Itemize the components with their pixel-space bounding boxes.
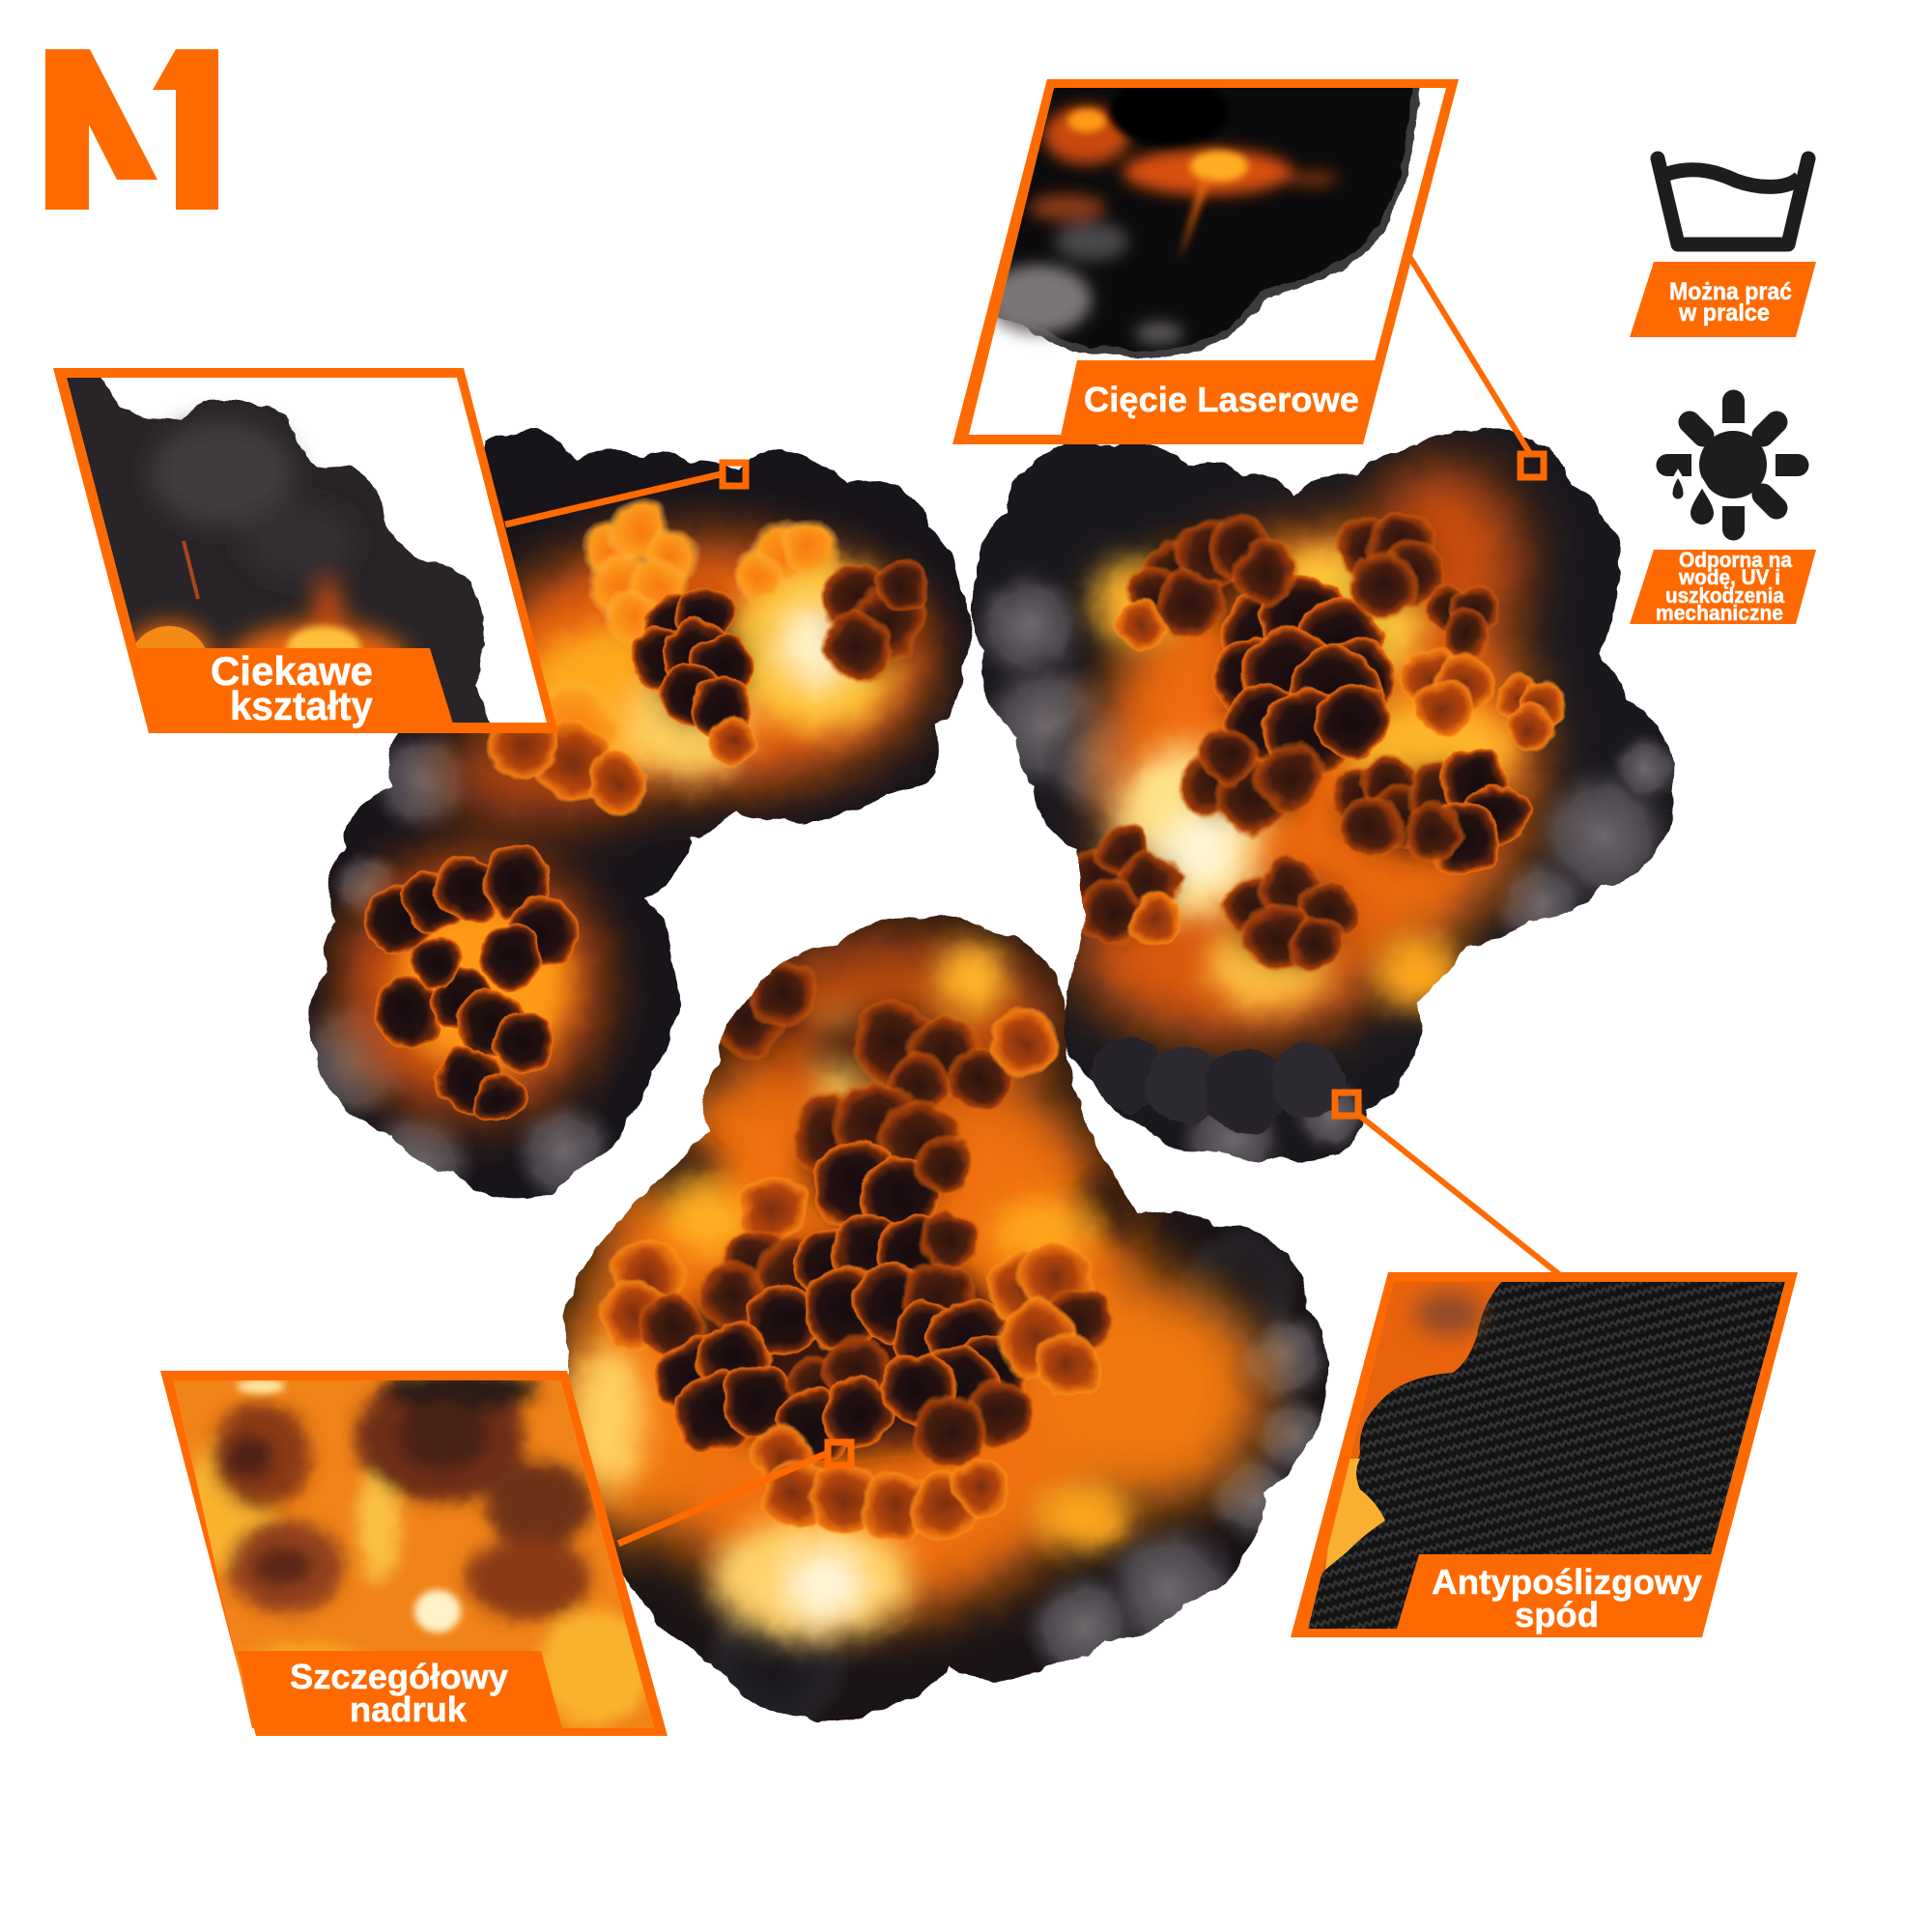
frame — [952, 79, 1459, 444]
caption: Szczegółowy — [290, 1657, 508, 1696]
label: resistance: wodę, UV i — [1678, 565, 1780, 589]
connector: shapes — [505, 463, 746, 525]
panel: Ciecie Laserowe — [952, 76, 1459, 444]
logo: M1 — [45, 49, 218, 210]
connector: anti-slip — [1335, 1093, 1560, 1275]
connector: print — [618, 1442, 851, 1544]
icon: washing basin — [1658, 158, 1808, 244]
label: resistance: uszkodzenia — [1665, 583, 1785, 608]
label: washable: w pralce — [1678, 299, 1770, 327]
frame — [160, 1371, 668, 1736]
label: washable — [1630, 262, 1816, 337]
explosion patch: top left — [291, 420, 989, 1230]
label: resistance: mechaniczne — [1656, 601, 1783, 625]
frame — [53, 368, 558, 733]
connector: laser cut — [1410, 258, 1544, 477]
caption: Cięcie Laserowe — [1084, 380, 1359, 419]
caption: nadruk — [350, 1690, 468, 1729]
panel: Szczegolowy nadruk — [160, 1371, 668, 1736]
icon: sun and water drops — [1656, 390, 1809, 541]
label: washable: Można prać — [1669, 278, 1792, 305]
caption — [237, 1651, 562, 1736]
caption: Ciekawe — [211, 648, 373, 694]
explosion patch: bottom — [544, 902, 1360, 1743]
label: resistance: Odporna na — [1679, 548, 1793, 572]
panel: Antyposlizgowy spod — [1291, 1272, 1798, 1637]
caption — [1059, 360, 1376, 444]
explosion patch: top right — [970, 427, 1675, 1163]
frame — [1291, 1272, 1798, 1637]
caption — [136, 648, 453, 733]
caption: spód — [1515, 1595, 1599, 1634]
caption — [1291, 1554, 1715, 1637]
label: resistance — [1630, 548, 1816, 625]
caption: kształty — [230, 683, 374, 728]
caption: Antypoślizgowy — [1432, 1562, 1702, 1602]
panel: Ciekawe ksztalty — [53, 367, 560, 733]
